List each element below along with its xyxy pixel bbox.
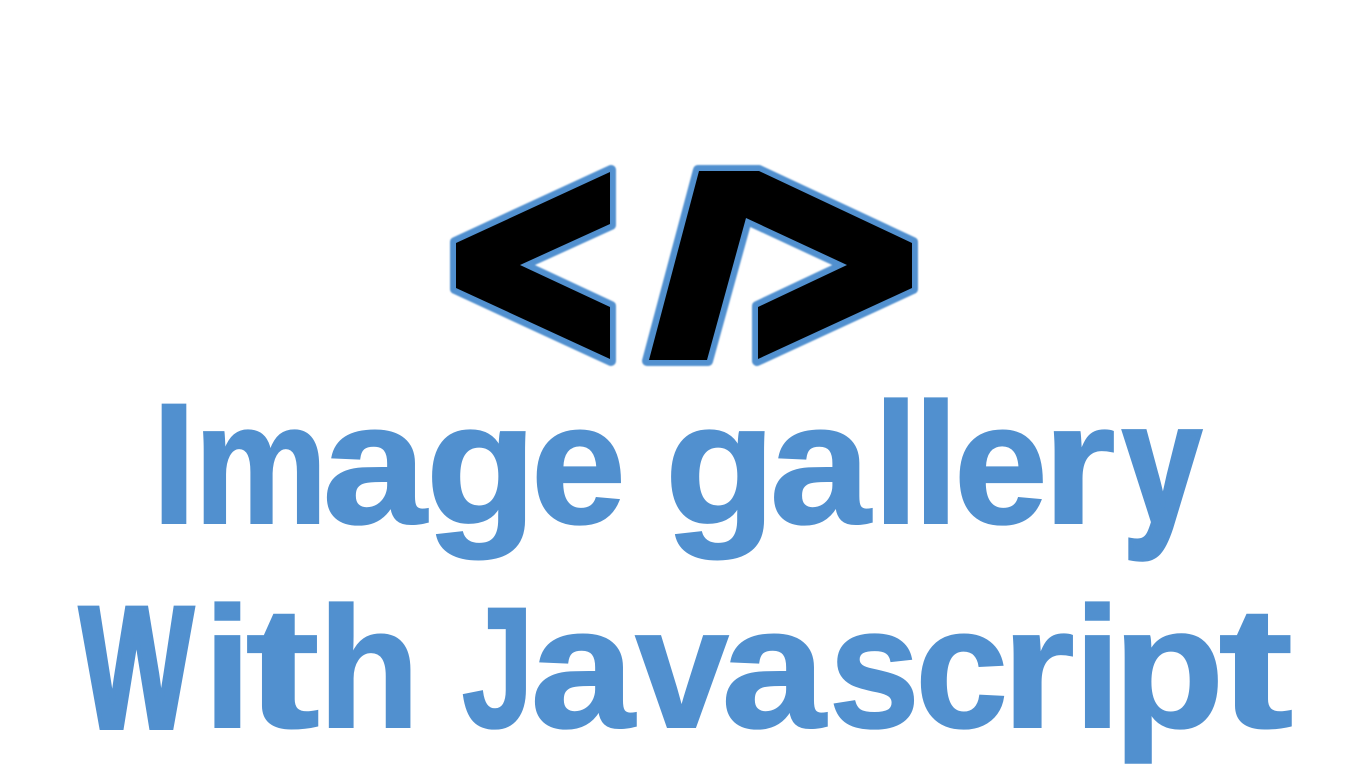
title line 1: g <box>665 368 776 560</box>
title line 2: J <box>462 572 534 764</box>
title line 2: h <box>318 572 420 764</box>
title line 1: e <box>531 368 626 560</box>
title line 1: a <box>770 368 872 560</box>
title line 2: c <box>915 572 1008 764</box>
title line 1: g <box>426 368 537 560</box>
title line 2: W <box>80 572 193 764</box>
title line 2: s <box>829 572 920 764</box>
icon: code brackets logo <box>455 170 913 361</box>
title line 2: i <box>203 572 252 764</box>
title line 1: y <box>1124 368 1200 560</box>
title line 2: t <box>1219 572 1293 764</box>
title line 1: l <box>874 368 918 560</box>
title line 2: r <box>1002 572 1075 764</box>
title line 2: a <box>722 572 827 764</box>
title line 1: I <box>152 368 196 560</box>
title line 2: v <box>635 572 729 764</box>
title line 1: m <box>194 368 328 560</box>
title line 1: e <box>954 368 1048 560</box>
title line 2: p <box>1113 572 1224 764</box>
title line 1: l <box>914 368 958 560</box>
title line 1: r <box>1043 368 1116 560</box>
title line 2: t <box>246 572 320 764</box>
title line 2: a <box>530 572 636 764</box>
title line 2: i <box>1074 572 1121 764</box>
title line 1: a <box>322 368 428 560</box>
